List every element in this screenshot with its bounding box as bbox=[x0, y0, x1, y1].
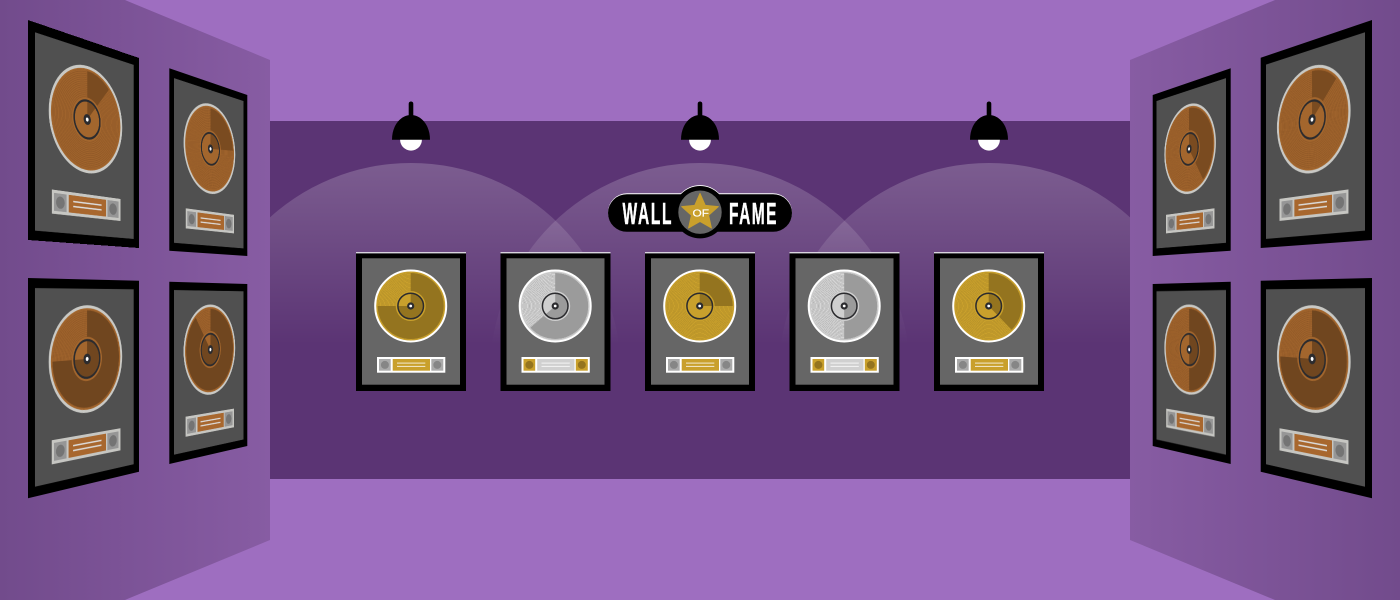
plaque: gold record 5 bbox=[934, 252, 1044, 391]
logo word: OF: OF bbox=[692, 209, 709, 220]
back wall bbox=[270, 121, 1130, 479]
logo word: FAME: FAME bbox=[729, 197, 776, 232]
plaque: right wall bottom inner bbox=[1152, 282, 1231, 464]
icon: star bbox=[682, 194, 718, 228]
plaque: right wall top outer bbox=[1260, 20, 1372, 248]
left side wall bbox=[0, 0, 270, 600]
plaque: silver record 2 bbox=[500, 252, 610, 391]
lamp light pools bbox=[270, 163, 1130, 325]
plaque: left wall bottom inner bbox=[169, 282, 248, 464]
plaque: left wall top outer bbox=[28, 20, 139, 248]
logo word: WALL: WALL bbox=[622, 197, 672, 232]
logo: Wall of Fame bbox=[608, 185, 792, 238]
lamp: right bbox=[970, 102, 1008, 151]
plaque: gold record 3 bbox=[645, 252, 755, 391]
plaque: gold record 1 bbox=[356, 252, 466, 391]
right side wall bbox=[1130, 0, 1400, 600]
lamp: left bbox=[392, 102, 430, 151]
lamp: centre bbox=[681, 102, 719, 151]
plaque: silver record 4 bbox=[790, 252, 900, 391]
plaque: left wall top inner bbox=[169, 68, 248, 256]
plaque: left wall bottom outer bbox=[28, 278, 139, 498]
plaque: right wall bottom outer bbox=[1260, 278, 1372, 498]
plaque: right wall top inner bbox=[1152, 68, 1231, 256]
